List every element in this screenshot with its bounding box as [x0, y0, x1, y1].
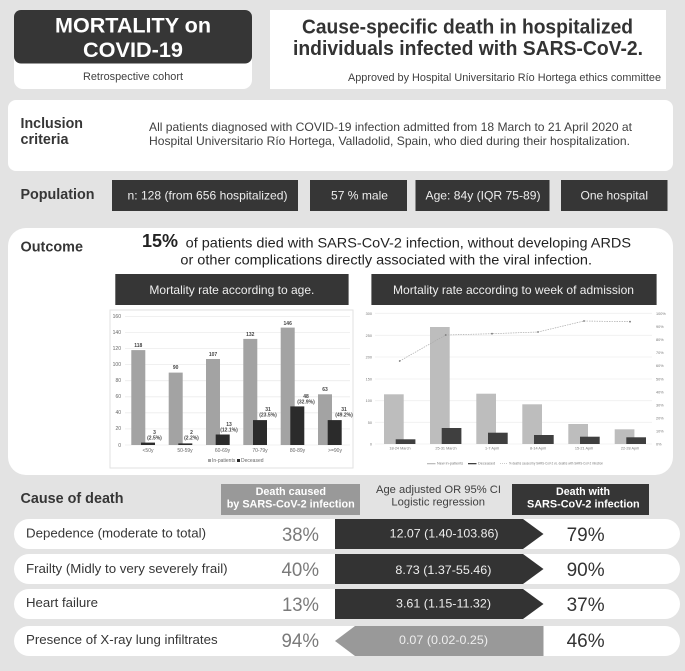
bar chart: mortality by age: 80-89y — [290, 448, 306, 454]
bar chart: mortality by age — [110, 310, 353, 468]
column header: odds ratio: Age adjusted OR 95% CI — [376, 484, 501, 496]
row: lung infiltrates — [14, 626, 680, 656]
bar chart: mortality by age: 120 — [113, 346, 121, 352]
combo chart: mortality by week of admission: 0 — [370, 442, 372, 446]
combo chart: mortality by week of admission: 20% — [656, 416, 664, 420]
pill: centres — [561, 180, 668, 211]
row: heart failure: 3.61 (1.15-11.32) — [396, 597, 491, 611]
bar chart: mortality by age: 20 — [115, 426, 121, 432]
bar chart: mortality by age: 48 — [303, 394, 309, 400]
inclusion criteria text — [149, 120, 633, 148]
column header: death with infection: SARS-CoV-2 infection — [527, 499, 640, 511]
column header: death with infection: Death with — [556, 486, 610, 498]
bar chart: mortality by age: (12.1%) — [220, 428, 238, 434]
pill: sample size: n: 128 (from 656 hospitalized) — [128, 188, 288, 202]
heading: study title: Cause-specific death in hospitalized — [302, 16, 633, 38]
combo chart: mortality by week of admission: 100% — [656, 312, 666, 316]
combo chart: mortality by week of admission: 300 — [366, 312, 372, 316]
row: lung infiltrates: 94% — [282, 631, 319, 652]
heading: population: Population — [20, 187, 95, 203]
pill: sex — [310, 180, 407, 211]
combo chart: mortality by week of admission: 40% — [656, 390, 664, 394]
bar chart: mortality by age: 63 — [322, 387, 328, 393]
combo chart: mortality by week of admission: 80% — [656, 338, 664, 342]
bar chart: mortality by age: 118 — [134, 343, 143, 349]
bar chart: mortality by age: 60 — [115, 394, 121, 400]
heading: outcome: Outcome — [20, 240, 83, 256]
pill: centres: One hospital — [580, 188, 648, 202]
bar chart: mortality by age: 70-79y — [252, 448, 268, 454]
row: lung infiltrates: Presence of X-ray lung infiltrates — [26, 632, 218, 647]
heading: inclusion criteria: Inclusion — [20, 116, 83, 132]
combo chart: mortality by week of admission — [366, 312, 666, 466]
panel: study title — [270, 10, 666, 89]
combo chart: mortality by week of admission: 60% — [656, 364, 664, 368]
column header: death caused by infection: Death caused — [256, 486, 326, 498]
panel: cause of death table — [14, 484, 680, 656]
chart heading: mortality by week: Mortality rate according to week of admission — [393, 283, 634, 297]
inclusion criteria text: All patients diagnosed with COVID-19 infection admitted from 18 March to 21 April 2020 at — [149, 120, 633, 134]
combo chart: mortality by week of admission: 200 — [366, 356, 372, 360]
bar chart: mortality by age: <50y — [143, 448, 154, 454]
combo chart: mortality by week of admission: 8-14 April — [530, 446, 546, 450]
row: frailty: 8.73 (1.37-55.46) — [395, 563, 491, 577]
chart heading: mortality by week — [371, 274, 657, 305]
heading: mortality on COVID-19: COVID-19 — [83, 38, 183, 62]
bar chart: mortality by age: 0 — [118, 443, 121, 449]
combo chart: mortality by week of admission: 100 — [366, 399, 372, 403]
column header: odds ratio: Logistic regression — [391, 497, 485, 509]
column header: death caused by infection — [221, 484, 360, 515]
bar chart: mortality by age: 2 — [190, 430, 193, 436]
bar chart: mortality by age: 50-59y — [177, 448, 193, 454]
row: dependence: 38% — [282, 525, 319, 546]
combo chart: mortality by week of admission: 22-28 April — [621, 446, 639, 450]
row: heart failure: 13% — [282, 595, 319, 616]
ethics approval text: Approved by Hospital Universitario Río Hortega ethics committee — [348, 72, 661, 84]
heading: cause of death: Cause of death — [20, 491, 124, 507]
bar chart: mortality by age: 60-69y — [215, 448, 231, 454]
panel: outcome — [8, 228, 673, 475]
bar chart: mortality by age: 160 — [113, 314, 121, 320]
combo chart: mortality by week of admission: 30% — [656, 404, 664, 408]
bar chart: mortality by age: 80 — [115, 378, 121, 384]
bar chart: mortality by age: 3 — [153, 430, 156, 436]
bar chart: mortality by age: 90 — [173, 365, 179, 371]
bar chart: mortality by age: (2.5%) — [147, 436, 162, 442]
panel: population — [20, 180, 668, 211]
bar chart: mortality by age: 13 — [226, 422, 232, 428]
bar chart: mortality by age: (49.2%) — [335, 412, 353, 418]
combo chart: mortality by week of admission: 10% — [656, 430, 664, 434]
inclusion criteria text: Hospital Universitario Río Hortega, Valladolid, Spain, who died during their hospitalization. — [149, 134, 630, 148]
combo chart: mortality by week of admission: 150 — [366, 378, 372, 382]
combo chart: mortality by week of admission: 50 — [368, 421, 372, 425]
combo chart: mortality by week of admission: Deceased — [478, 462, 495, 466]
heading: study title: individuals infected with SARS-CoV-2. — [293, 38, 643, 60]
combo chart: mortality by week of admission: 18-24 March — [389, 446, 411, 450]
combo chart: mortality by week of admission: % deaths caused by SARS-CoV-2 vs. deaths with SARS-CoV-2 infection — [509, 462, 603, 466]
row: heart failure: 37% — [567, 595, 605, 616]
column header: odds ratio — [376, 484, 501, 509]
row: lung infiltrates: 0.07 (0.02-0.25) — [399, 633, 488, 647]
row: dependence — [14, 519, 680, 549]
row: heart failure: Heart failure — [26, 595, 98, 610]
bar chart: mortality by age: 140 — [113, 330, 121, 336]
row: dependence: 79% — [567, 525, 605, 546]
bar chart: mortality by age: (32.9%) — [297, 400, 315, 406]
bar chart: mortality by age: 132 — [246, 332, 255, 338]
row: dependence: 12.07 (1.40-103.86) — [390, 527, 498, 541]
pill: age — [416, 180, 550, 211]
chart heading: mortality by age — [115, 274, 349, 305]
bar chart: mortality by age: (2.2%) — [184, 436, 199, 442]
bar chart: mortality by age: 40 — [115, 410, 121, 416]
column header: death with infection — [512, 484, 649, 515]
row: dependence: Depedence (moderate to total) — [26, 526, 206, 541]
heading: mortality on COVID-19 — [55, 14, 211, 62]
combo chart: mortality by week of admission: New in-patients — [437, 462, 463, 466]
combo chart: mortality by week of admission: 250 — [366, 334, 372, 338]
combo chart: mortality by week of admission: 50% — [656, 378, 664, 382]
combo chart: mortality by week of admission: 90% — [656, 325, 664, 329]
pill: sample size — [112, 180, 298, 211]
heading: inclusion criteria — [20, 116, 83, 148]
pill: age: Age: 84y (IQR 75-89) — [426, 188, 540, 202]
heading: study title — [293, 16, 643, 60]
row: frailty — [14, 554, 680, 584]
row: lung infiltrates: 46% — [567, 631, 605, 652]
chart heading: mortality by age: Mortality rate according to age. — [149, 283, 314, 297]
outcome statement: 15% — [142, 231, 178, 251]
row: heart failure — [14, 589, 680, 619]
row: frailty: 40% — [282, 560, 319, 581]
panel: main title — [14, 10, 252, 89]
bar chart: mortality by age: (23.5%) — [259, 412, 277, 418]
bar chart: mortality by age: 31 — [341, 407, 347, 413]
outcome statement: or other complications directly associated with the viral infection. — [180, 252, 592, 268]
combo chart: mortality by week of admission: 0% — [656, 442, 662, 446]
row: frailty: 90% — [567, 560, 605, 581]
heading: inclusion criteria: criteria — [20, 132, 70, 148]
bar chart: mortality by age: Deceased — [241, 458, 264, 464]
combo chart: mortality by week of admission: 25-31 March — [435, 446, 457, 450]
bar chart: mortality by age: In-patients — [212, 458, 236, 464]
panel: inclusion criteria — [8, 100, 673, 171]
combo chart: mortality by week of admission: 1-7 April — [485, 446, 499, 450]
row: frailty: Frailty (Midly to very severely frail) — [26, 561, 228, 576]
pill: sex: 57 % male — [331, 188, 388, 202]
study design text: Retrospective cohort — [83, 71, 183, 83]
bar chart: mortality by age: 31 — [265, 407, 271, 413]
bar chart: mortality by age: 146 — [284, 321, 292, 327]
bar chart: mortality by age: 100 — [113, 362, 121, 368]
combo chart: mortality by week of admission: 70% — [656, 351, 664, 355]
column header: death caused by infection: by SARS-CoV-2 infection — [227, 499, 355, 511]
outcome statement: of patients died with SARS-CoV-2 infection, without developing ARDS — [186, 235, 631, 251]
bar chart: mortality by age: >=90y — [328, 448, 342, 454]
heading: mortality on COVID-19: MORTALITY on — [55, 14, 211, 38]
combo chart: mortality by week of admission: 15-21 April — [575, 446, 593, 450]
outcome statement — [142, 231, 631, 268]
bar chart: mortality by age: 107 — [209, 352, 217, 358]
